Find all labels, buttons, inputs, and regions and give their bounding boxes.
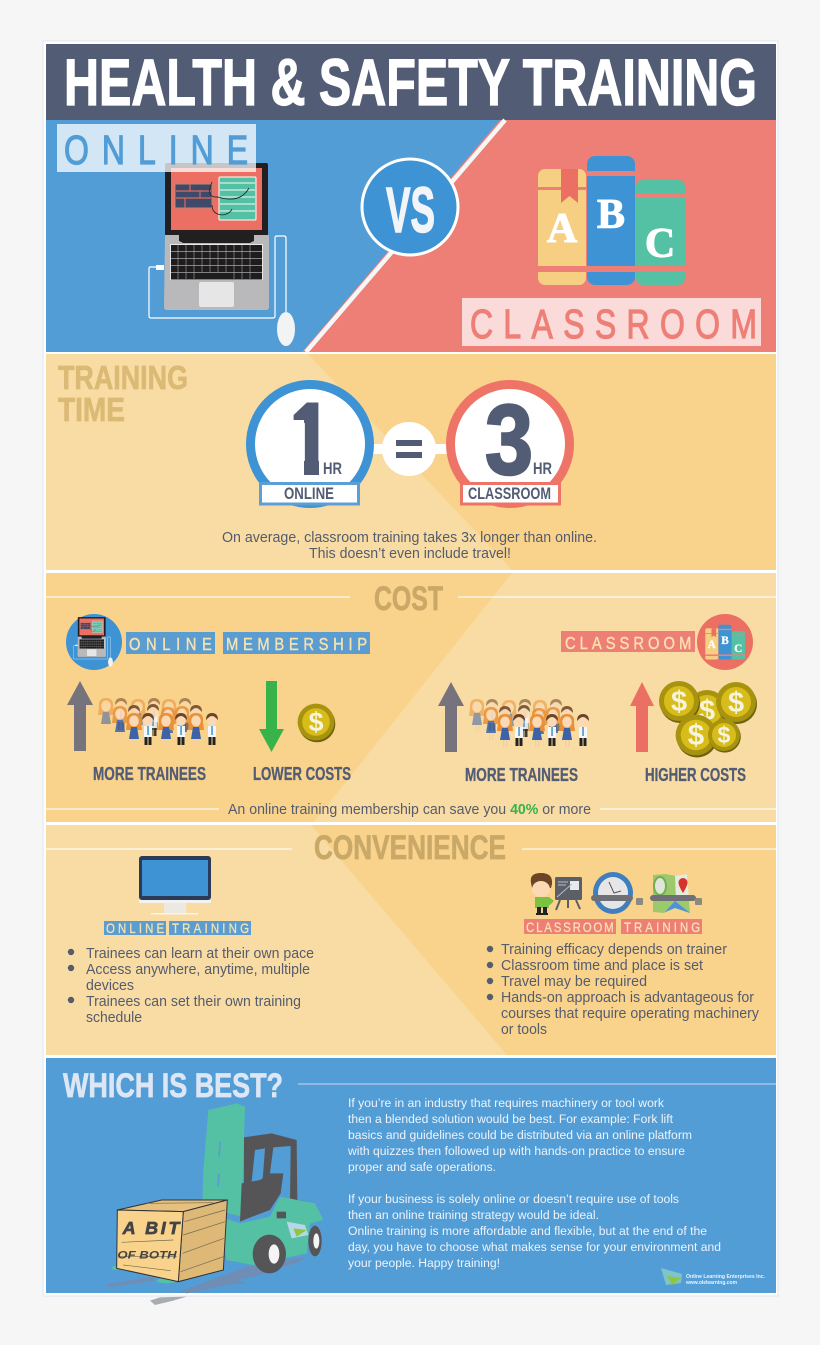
body text: your people. Happy training! [348, 1256, 500, 1270]
list: classroom considerations: or tools [501, 1022, 547, 1038]
icon: trainer with board [531, 873, 582, 915]
icon: locked clock [591, 872, 643, 914]
list: classroom considerations: Training efficacy depends on trainer [501, 942, 727, 958]
list: classroom considerations: Travel may be required [501, 974, 647, 990]
icon: books [538, 156, 685, 285]
label: online training: TRAINING [172, 920, 249, 936]
label: classroom training: CLASSROOM [526, 919, 614, 935]
label: online membership: ONLINE [129, 635, 212, 654]
heading: cost: COST [374, 580, 443, 618]
label: classroom training [524, 919, 702, 935]
heading: convenience: CONVENIENCE [314, 829, 506, 867]
crate lettering: A BIT [122, 1218, 181, 1238]
label: more trainees classroom: MORE TRAINEES [465, 765, 578, 785]
classroom 3 hr badge: CLASSROOM [468, 484, 551, 503]
panel: online vs classroom hero [46, 120, 776, 352]
heading: training time: TRAINING [58, 359, 188, 396]
list: online benefits: schedule [86, 1010, 142, 1026]
panel: convenience [46, 825, 776, 1055]
trainees group: classroom [469, 699, 589, 747]
list: online benefits: devices [86, 978, 134, 994]
classroom 3 hr badge: 3 [485, 384, 533, 495]
icon: classroom circle [697, 614, 753, 670]
caption [222, 530, 597, 562]
list: classroom considerations [487, 942, 760, 1038]
classroom 3 hr badge: HR [533, 460, 552, 478]
online label: ONLINE [64, 127, 248, 173]
illustration: forklift with crate [107, 1103, 323, 1305]
list: classroom considerations: Hands-on approach is advantageous for [501, 990, 754, 1006]
list: online benefits: Trainees can learn at their own pace [86, 946, 314, 962]
label: classroom training: TRAINING [624, 919, 700, 935]
body text: then a blended solution would be best. For example: Fork lift [348, 1112, 674, 1126]
label: online training: ONLINE [106, 920, 164, 936]
body text: with quizzes then followed up with hands-on practice to ensure [347, 1144, 685, 1158]
body text: basics and guidelines could be distributed via an online platform [348, 1128, 692, 1142]
body text [347, 1096, 721, 1270]
label: online membership [126, 632, 370, 654]
body text: proper and safe operations. [348, 1160, 496, 1174]
crate lettering: OF BOTH [117, 1249, 178, 1261]
icon: monitor [139, 856, 211, 914]
label: classroom: CLASSROOM [565, 634, 691, 653]
heading: which is best: WHICH IS BEST? [63, 1067, 283, 1105]
list: online benefits [68, 946, 314, 1026]
online 1 hr badge [250, 384, 370, 504]
label: more trainees: MORE TRAINEES [93, 764, 206, 784]
label: higher costs: HIGHER COSTS [645, 765, 746, 785]
heading: training time [58, 359, 188, 428]
body text: If you’re in an industry that requires machinery or tool work [348, 1096, 665, 1110]
icon: single coin [298, 704, 335, 742]
panel: cost [46, 573, 776, 822]
logo: Online Learning Enterprises Inc. [686, 1274, 766, 1280]
online 1 hr badge: HR [323, 460, 342, 478]
logo [661, 1268, 766, 1286]
online 1 hr badge: ONLINE [284, 484, 334, 503]
equals connector [360, 422, 460, 476]
vs badge: VS [386, 174, 435, 246]
arrow: more trainees online [67, 681, 93, 751]
arrow: higher costs [630, 682, 654, 752]
icon: locked map [650, 874, 702, 913]
label: lower costs: LOWER COSTS [253, 764, 351, 784]
label: online membership: MEMBERSHIP [226, 635, 367, 654]
logo: www.olelearning.com [685, 1280, 738, 1286]
list: classroom considerations: Classroom time and place is set [501, 958, 703, 974]
arrow: more trainees classroom [438, 682, 464, 752]
crate lettering [117, 1218, 181, 1261]
heading: training time: TIME [58, 391, 125, 428]
list: online benefits: Access anywhere, anytime, multiple [86, 962, 310, 978]
classroom 3 hr badge [450, 384, 570, 504]
online 1 hr badge: 1 [291, 384, 329, 495]
caption: On average, classroom training takes 3x longer than online. [222, 530, 597, 546]
arrow: lower costs [259, 681, 284, 752]
panel: which is best [46, 1058, 776, 1305]
body text: Online training is more affordable and flexible, but at the end of the [348, 1224, 707, 1238]
icon: online circle [66, 614, 122, 670]
icon: coin pile [659, 681, 757, 757]
body text: then an online training strategy would be ideal. [348, 1208, 599, 1222]
label: online training [104, 920, 251, 936]
panel: training time [46, 354, 776, 570]
list: online benefits: Trainees can set their own training [86, 994, 301, 1010]
icon: laptop and mouse [149, 163, 295, 346]
body text: If your business is solely online or doesn’t require use of tools [348, 1192, 679, 1206]
trainees group: online [98, 698, 218, 746]
classroom label: CLASSROOM [470, 301, 757, 347]
vs badge [362, 159, 458, 255]
list: classroom considerations: courses that require operating machinery [501, 1006, 760, 1022]
body text: day, you have to choose what makes sense for your environment and [348, 1240, 721, 1254]
caption: This doesn’t even include travel! [309, 546, 511, 562]
savings note: An online training membership can save you 40% or more [228, 802, 591, 818]
